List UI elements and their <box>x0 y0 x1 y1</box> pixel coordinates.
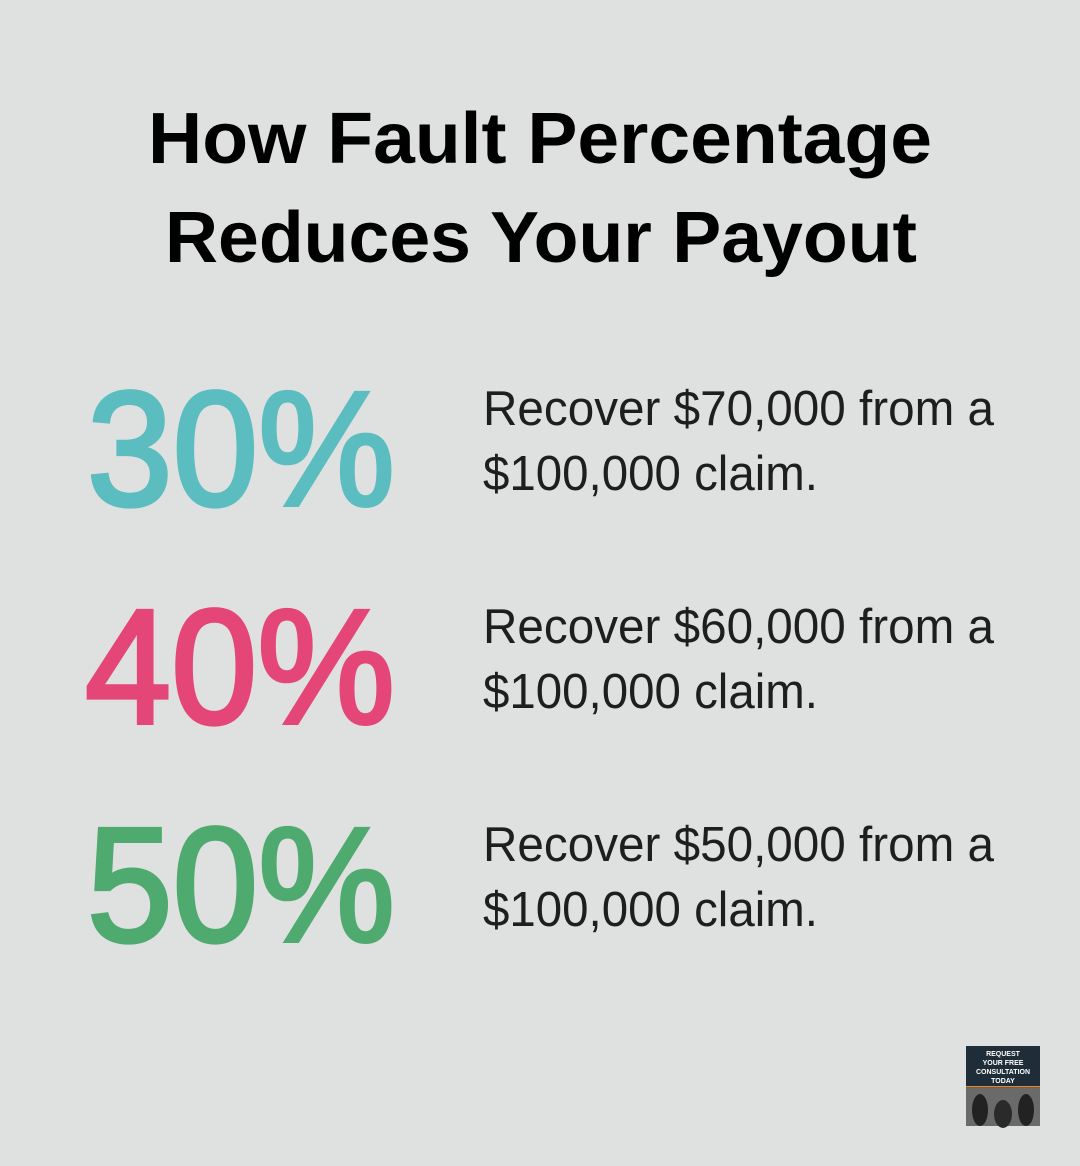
title: Reduces Your Payout <box>165 198 917 278</box>
text: 30% description <box>483 382 995 501</box>
row: 50% <box>87 793 995 976</box>
text: 30% description: Recover $70,000 from a <box>483 382 995 436</box>
badge: consultation: YOUR FREE <box>983 1060 1024 1067</box>
badge: consultation: CONSULTATION <box>976 1069 1030 1076</box>
row: 30% <box>87 357 995 540</box>
row: 40% <box>85 575 995 758</box>
text: 30% description: $100,000 claim. <box>483 447 818 501</box>
text: 40% description <box>483 600 995 719</box>
stat: 40%: 40% <box>85 575 395 758</box>
badge: consultation: TODAY <box>991 1078 1015 1085</box>
text: 50% description: Recover $50,000 from a <box>483 818 995 872</box>
text: 50% description: $100,000 claim. <box>483 883 818 937</box>
stat: 30%: 30% <box>87 357 395 540</box>
badge: consultation: REQUEST <box>986 1051 1021 1058</box>
title <box>148 99 932 278</box>
stat: 50%: 50% <box>87 793 395 976</box>
badge: consultation <box>966 1046 1040 1128</box>
text: 40% description: $100,000 claim. <box>483 665 818 719</box>
text: 50% description <box>483 818 995 937</box>
text: 40% description: Recover $60,000 from a <box>483 600 995 654</box>
title: How Fault Percentage <box>148 99 932 179</box>
